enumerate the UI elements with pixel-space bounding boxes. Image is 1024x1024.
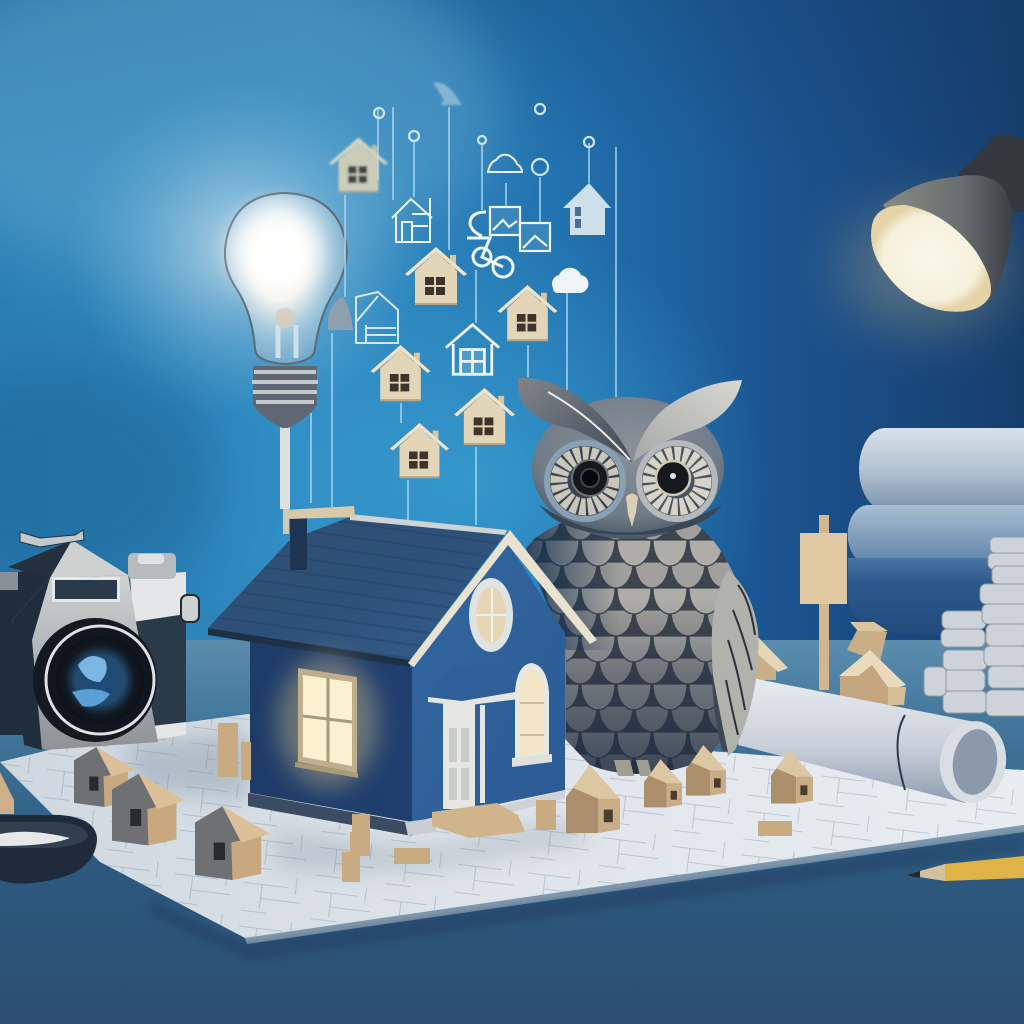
- prism: [8, 540, 72, 578]
- lamp: [840, 134, 1024, 330]
- coin stacks: [924, 537, 1024, 716]
- right gable wall: [412, 543, 565, 822]
- front wall: [250, 640, 412, 822]
- floating line icons: [328, 82, 611, 374]
- pencil: [906, 856, 1024, 881]
- owl beak: [626, 494, 638, 527]
- wooden sign: [800, 515, 847, 690]
- owl: [518, 378, 759, 776]
- owl ears: [518, 378, 742, 462]
- background scrolls: [848, 428, 1024, 640]
- large blueprint roll: [738, 676, 1011, 807]
- icon: line house one: [392, 198, 432, 242]
- icon: picture frames: [490, 207, 550, 251]
- far left dark body: [0, 570, 50, 735]
- hot shoe: [20, 530, 84, 547]
- floor surface: [0, 640, 1024, 1024]
- small houses behind roll: [755, 622, 906, 705]
- left dish: [0, 815, 97, 884]
- icon: line house two: [446, 325, 499, 374]
- lit window: [278, 656, 378, 788]
- light bulb: [225, 193, 347, 509]
- foundation: [248, 793, 412, 836]
- owl head: [532, 397, 724, 539]
- roof: [208, 517, 507, 660]
- small wooden houses on plan: [0, 723, 813, 882]
- chimney: [290, 518, 307, 570]
- lug: [181, 595, 199, 622]
- front plate: [12, 575, 158, 750]
- owl feet: [614, 760, 652, 776]
- lens: [33, 618, 157, 742]
- icon: white house: [563, 183, 611, 235]
- arched window: [512, 663, 552, 767]
- owl right eye: [636, 440, 718, 522]
- roof trim: [408, 530, 597, 667]
- door: [443, 704, 485, 809]
- blue house: [208, 500, 597, 838]
- icon: solid cloud: [552, 268, 589, 293]
- camera: [0, 530, 199, 750]
- icon: grey house: [328, 297, 353, 330]
- hanging strings: [311, 107, 616, 525]
- icon: frame house: [356, 292, 398, 343]
- floating wooden houses: [329, 138, 557, 478]
- porch steps: [432, 803, 525, 838]
- wooden blocks: [218, 723, 792, 882]
- round window: [469, 578, 513, 652]
- icon: cloud outline: [488, 155, 522, 172]
- icon: pin circles: [374, 104, 594, 175]
- owl left eye: [544, 440, 626, 522]
- side panel: [130, 572, 186, 740]
- owl wing: [712, 570, 759, 756]
- porch roof: [428, 663, 528, 706]
- partial house at left edge: [0, 772, 14, 814]
- icon: bicycle: [467, 212, 513, 277]
- owl body: [526, 520, 745, 774]
- icon: bird: [433, 82, 462, 105]
- blueprint paper: [0, 714, 1024, 960]
